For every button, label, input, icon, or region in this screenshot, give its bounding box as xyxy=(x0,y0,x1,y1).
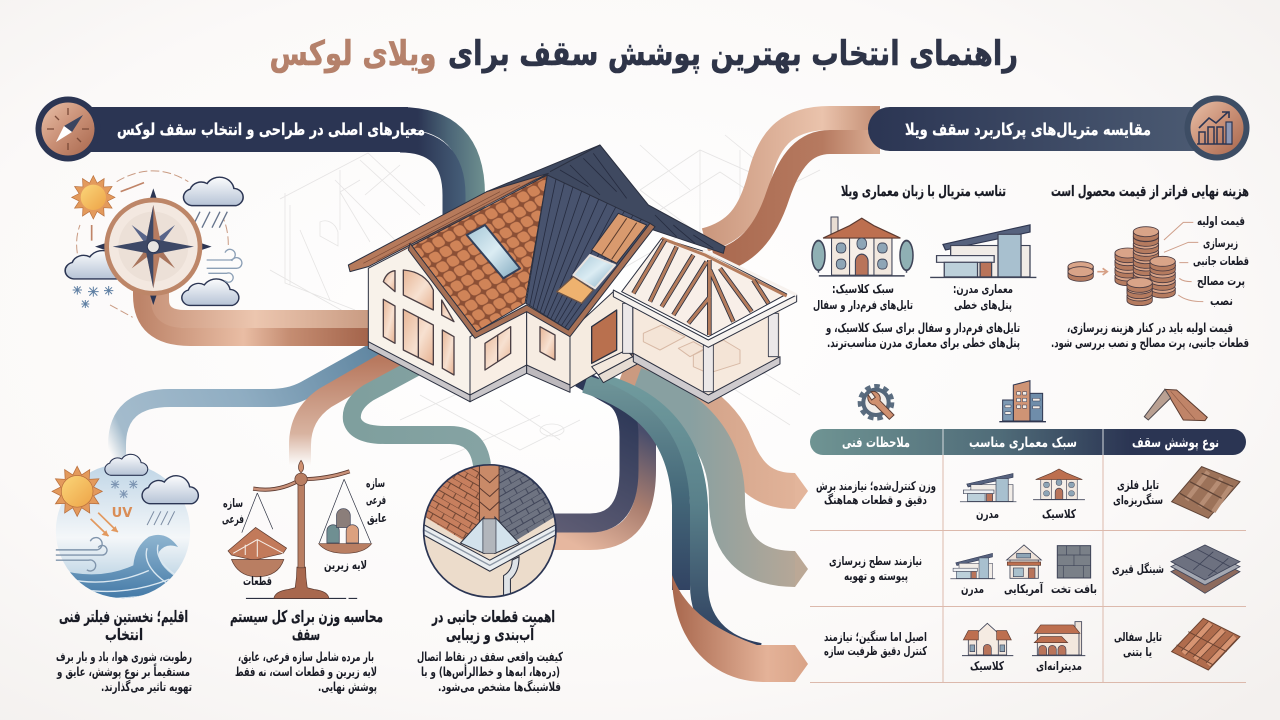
table row: clay or concrete tile: تایل سفالی xyxy=(1114,630,1162,644)
title xyxy=(270,34,1018,74)
labels: scale parts: لایه زیرین xyxy=(324,558,367,572)
table row: metal stone-coated tile: دقیق و قطعات هماهنگ xyxy=(824,493,927,508)
roof fascia xyxy=(408,223,655,338)
text: cost description xyxy=(1051,320,1249,350)
roof: slate panels xyxy=(526,175,650,330)
ribbon: right copper from header to house xyxy=(705,118,880,262)
house illustration xyxy=(348,145,797,403)
table row: clay or concrete tile: کلاسیک xyxy=(970,659,1004,673)
text block: climate: انتخاب xyxy=(105,625,143,644)
illustration: coin stacks xyxy=(1068,222,1203,306)
icon: pitched roof xyxy=(1144,389,1207,421)
table header: ملاحظات فنی xyxy=(842,435,910,451)
table row: asphalt shingle: مدرن xyxy=(961,582,984,596)
icon: compass badge xyxy=(36,96,100,162)
table row: metal stone-coated tile: وزن کنترل‌شده؛ نیازمند برش xyxy=(816,479,936,494)
label: modern architecture: پنل‌های خطی xyxy=(954,298,1012,312)
text block: climate xyxy=(56,607,192,694)
text: fit description: پنل‌های خطی برای معماری مدرن مناسب‌ترند. xyxy=(827,335,1020,350)
text block: weight calculation: سقف xyxy=(292,625,320,644)
icon: growth chart badge xyxy=(1184,96,1250,160)
table row: clay or concrete tile xyxy=(824,618,1240,673)
text block: accessories: آب‌بندی و زیبایی xyxy=(446,624,534,644)
text block: climate: رطوبت، شوری هوا، باد و بار برف xyxy=(56,649,192,664)
table row: metal stone-coated tile: سنگ‌ریزه‌ای xyxy=(1113,493,1163,507)
illustration: climate circle: UV xyxy=(112,506,133,521)
labels: scale parts: فرعی xyxy=(366,493,386,507)
header: main criteria xyxy=(68,107,474,250)
table row: clay or concrete tile: مدیترانه‌ای xyxy=(1036,659,1082,673)
table: roof covering comparison xyxy=(810,429,1246,682)
labels: scale parts xyxy=(222,476,387,588)
text block: weight calculation: محاسبه وزن برای کل سیستم xyxy=(230,607,383,626)
table row: clay or concrete tile: یا بتنی xyxy=(1123,645,1152,659)
labels: cost components: نصب xyxy=(1210,294,1233,308)
labels: cost components: زیرسازی xyxy=(1203,236,1238,250)
walls xyxy=(368,247,633,402)
text block: accessories: فلاشینگ‌ها مشخص می‌شود. xyxy=(438,679,561,694)
table row: asphalt shingle: آمریکایی xyxy=(1004,581,1044,596)
illustration: climate circle xyxy=(51,454,198,605)
label: modern architecture xyxy=(953,282,1013,312)
label: classic style xyxy=(813,282,913,313)
text block: accessories xyxy=(417,607,563,694)
title: ویلای لوکس xyxy=(270,34,436,74)
table header xyxy=(810,429,1246,455)
icon: modern villa xyxy=(930,225,1036,277)
ribbon: teal and copper arrow to row three xyxy=(585,382,808,682)
label: modern architecture: معماری مدرن: xyxy=(953,282,1013,296)
icon: classic villa xyxy=(812,217,913,276)
text block: accessories: کیفیت واقعی سقف در نقاط اتصال xyxy=(417,649,563,664)
table row: clay or concrete tile: کنترل دقیق ظرفیت سازه xyxy=(824,644,927,658)
labels: scale parts: سازه xyxy=(366,476,385,490)
text block: accessories: اهمیت قطعات جانبی در xyxy=(431,607,555,626)
labels: cost components: پرت مصالح xyxy=(1197,274,1245,288)
labels: cost components: قیمت اولیه xyxy=(1197,214,1245,229)
table row: clay or concrete tile: اصیل اما سنگین؛ نیازمند xyxy=(824,630,927,644)
ribbon: copper arrow to row one xyxy=(625,365,808,509)
table row: asphalt shingle: نیازمند سطح زیرسازی xyxy=(829,554,922,568)
table row: asphalt shingle xyxy=(829,545,1240,596)
table row: asphalt shingle: بافت تخت xyxy=(1051,582,1097,596)
labels: cost components xyxy=(1193,214,1249,308)
table row: metal stone-coated tile: کلاسیک xyxy=(1042,507,1076,521)
text block: weight calculation xyxy=(230,607,383,694)
pergola xyxy=(622,238,787,337)
text block: climate: اقلیم؛ نخستین فیلتر فنی xyxy=(59,607,188,626)
illustration: balance scale xyxy=(228,460,372,598)
porch xyxy=(633,307,780,395)
table header: سبک معماری مناسب xyxy=(969,435,1077,451)
labels: scale parts: سازه xyxy=(223,496,243,510)
text: fit description: تایل‌های فرم‌دار و سفال برای سبک کلاسیک، و xyxy=(825,320,1020,336)
icon: gear and wrench xyxy=(860,387,894,419)
text: fit description xyxy=(825,320,1020,350)
label: classic style: تایل‌های فرم‌دار و سفال xyxy=(813,298,913,313)
table header: نوع پوشش سقف xyxy=(1132,435,1219,451)
table row: asphalt shingle: پیوسته و تهویه xyxy=(844,569,908,584)
illustration: roof flashing detail circle xyxy=(423,464,557,602)
subheading: architectural fit: تناسب متریال با زبان معماری ویلا xyxy=(841,184,1006,200)
header: material comparison: مقایسه متریال‌های پرکاربرد سقف ویلا xyxy=(905,120,1151,140)
icon: buildings xyxy=(999,381,1046,422)
header: main criteria: معیارهای اصلی در طراحی و انتخاب سقف لوکس xyxy=(117,120,425,140)
text block: climate: تهویه تاثیر می‌گذارند. xyxy=(101,679,192,694)
ribbon: left copper from compass to house xyxy=(142,280,372,337)
labels: scale parts: قطعات xyxy=(243,574,272,588)
header: material comparison xyxy=(868,107,1200,151)
text block: climate: مستقیماً بر نوع پوشش، عایق و xyxy=(56,662,190,679)
table row: metal stone-coated tile: تایل فلزی xyxy=(1117,478,1159,492)
faint architectural sketches xyxy=(270,135,820,460)
illustration: compass with weather xyxy=(65,171,243,317)
roof back xyxy=(487,145,725,253)
labels: scale parts: فرعی xyxy=(222,512,244,526)
labels: cost components: قطعات جانبی xyxy=(1193,254,1249,268)
table row: metal stone-coated tile: مدرن xyxy=(976,507,999,521)
ribbon: lower left teal to accessories xyxy=(352,365,482,465)
ribbon: gray-teal arrow to row two xyxy=(635,385,808,587)
text block: accessories: (دره‌ها، ابه‌ها و خط‌الرأس‌ها) و با xyxy=(421,663,560,679)
door and steps xyxy=(592,310,617,363)
windows xyxy=(383,270,555,375)
text block: weight calculation: پوشش نهایی. xyxy=(318,679,377,694)
title: راهنمای انتخاب بهترین پوشش سقف برای xyxy=(448,34,1018,74)
text block: weight calculation: لایه زیرین و قطعات است، نه فقط xyxy=(235,664,377,679)
table row: asphalt shingle: شینگل قیری xyxy=(1112,562,1164,576)
labels: scale parts: عایق xyxy=(367,511,387,525)
ribbon: navy to accessories photo xyxy=(552,378,647,541)
ribbon: lower left copper to weight xyxy=(300,352,405,470)
roof: terracotta slope xyxy=(348,173,548,272)
table row: metal stone-coated tile xyxy=(816,467,1240,521)
label: classic style: سبک کلاسیک: xyxy=(832,282,894,296)
ribbon: lower left blue to climate xyxy=(117,346,384,470)
text block: weight calculation: بار مرده شامل سازه فرعی، عایق، xyxy=(238,649,374,664)
